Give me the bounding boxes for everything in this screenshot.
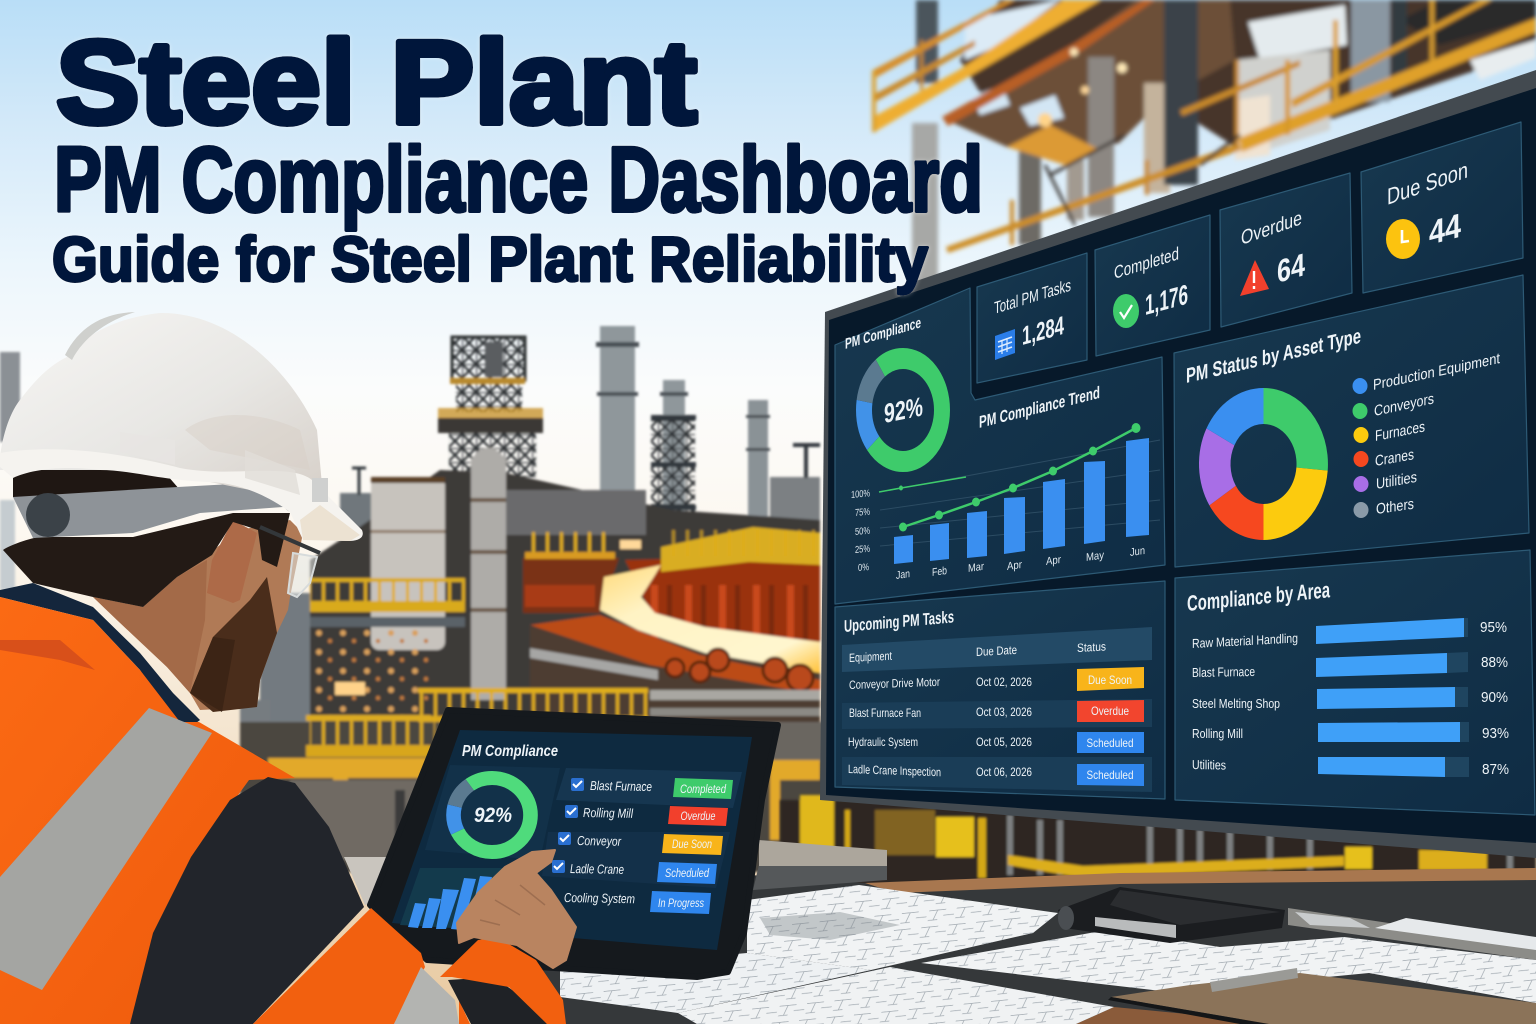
chart: PM compliance trend: 25% (855, 544, 870, 556)
panel: upcoming PM tasks: Hydraulic System (848, 735, 918, 749)
panel: compliance by area: Blast Furnace (1192, 664, 1255, 680)
dark sleeve (130, 777, 364, 1024)
panel: upcoming PM tasks: Oct 05, 2026 (976, 735, 1032, 749)
chart: PM compliance trend: Apr (1046, 554, 1061, 568)
glowing red structure (523, 527, 820, 740)
yellow walkway bottom (418, 688, 648, 724)
tablet list: In Progress (658, 898, 704, 910)
panel: compliance by area: 87% (1482, 761, 1509, 778)
tablet (370, 710, 778, 977)
icon: calendar (995, 329, 1015, 360)
tablet ring (454, 778, 530, 852)
chart: PM compliance trend (851, 382, 1160, 582)
worker (0, 312, 566, 1024)
panel: compliance by area: 93% (1482, 725, 1509, 742)
panel: upcoming PM tasks: Conveyor Drive Motor (849, 675, 940, 692)
panel: compliance by area: Steel Melting Shop (1192, 696, 1280, 711)
chart: PM compliance trend: Mar (968, 561, 984, 575)
legend: Others (1376, 496, 1414, 518)
status pills: Overdue (1091, 704, 1129, 718)
card: due soon (1361, 122, 1523, 293)
icon: check (1113, 294, 1139, 328)
smoke stacks (596, 326, 820, 550)
title line 2: PM Compliance Dashboard (54, 129, 983, 231)
panel: PM status by asset type (1174, 275, 1529, 567)
panel: upcoming PM tasks: Oct 03, 2026 (976, 705, 1032, 719)
head and neck (3, 460, 303, 712)
card: completed: 1,176 (1145, 279, 1188, 322)
panel: compliance by area: Raw Material Handling (1192, 630, 1298, 651)
chart: PM compliance trend: Apr (1007, 559, 1022, 573)
legend: Utilities (1376, 469, 1417, 493)
card: due soon: 44 (1429, 207, 1462, 253)
card: completed (1095, 215, 1210, 356)
panel: upcoming PM tasks: Oct 06, 2026 (976, 765, 1032, 779)
yellow walkway left (310, 578, 465, 627)
chart: PM compliance ring (864, 358, 942, 462)
chart: PM compliance trend: Feb (932, 565, 947, 579)
background: steel plant (0, 326, 850, 872)
icon: warning (1240, 260, 1269, 296)
device on table (1058, 887, 1285, 943)
panel: compliance by area: Utilities (1192, 757, 1226, 773)
card: completed: Completed (1114, 243, 1179, 283)
chart: PM compliance trend: 50% (855, 526, 870, 538)
card: overdue (1220, 173, 1352, 327)
chart: PM compliance trend: May (1086, 549, 1104, 564)
safety glasses (260, 527, 320, 597)
panel: PM compliance and trend background (835, 288, 1165, 604)
panel: upcoming PM tasks: Equipment (849, 649, 892, 665)
title line 3: Guide for Steel Plant Reliability (52, 225, 928, 295)
panel: compliance by area: 95% (1480, 619, 1507, 636)
molten steel strip (600, 565, 820, 673)
chart: PM compliance trend: Jun (1130, 545, 1145, 559)
blueprints (560, 885, 1536, 1024)
vest (0, 583, 295, 1024)
table (344, 840, 1536, 1024)
status pills: Due Soon (1088, 673, 1132, 687)
panel: upcoming PM tasks: Status (1077, 639, 1106, 655)
tablet list: Blast Furnace (590, 778, 652, 794)
panel: upcoming PM tasks: Upcoming PM Tasks (844, 607, 954, 636)
legend: Cranes (1375, 446, 1414, 470)
card: due soon: Due Soon (1387, 158, 1468, 211)
forearm cuff (440, 937, 566, 1024)
panel: compliance by area (1175, 550, 1535, 815)
card: total PM tasks: Total PM Tasks (994, 275, 1071, 318)
chart: PM compliance trend: 0% (858, 562, 869, 574)
tablet list: Overdue (680, 811, 716, 823)
panel: upcoming PM tasks: Oct 02, 2026 (976, 675, 1032, 689)
tablet heading: PM Compliance (462, 743, 558, 760)
card: total PM tasks (977, 253, 1087, 383)
panel: compliance by area: Rolling Mill (1192, 726, 1243, 741)
title line 1: Steel Plant (56, 17, 697, 149)
bars (1316, 618, 1469, 777)
chart: donut (1199, 388, 1328, 540)
status pills: Scheduled (1086, 768, 1134, 782)
helmet strap (13, 483, 300, 538)
panel: upcoming PM tasks: Blast Furnace Fan (849, 706, 921, 720)
tablet list: Scheduled (665, 868, 709, 880)
rollers (666, 649, 813, 691)
tablet ring: 92% (474, 804, 512, 827)
panel: compliance by area: 90% (1481, 689, 1508, 706)
tablet list: Conveyor (577, 833, 622, 849)
tablet list: Completed (680, 784, 726, 796)
panel: compliance by area: Compliance by Area (1187, 577, 1330, 616)
card: overdue: Overdue (1241, 207, 1302, 250)
grey box (753, 840, 887, 890)
icon: clock (1386, 219, 1420, 259)
panel: upcoming PM tasks: Ladle Crane Inspection (848, 762, 941, 779)
orange sleeve band (253, 908, 470, 1024)
legend: Furnaces (1375, 418, 1425, 445)
panel: upcoming PM tasks: Due Date (976, 643, 1017, 659)
tablet list (542, 768, 742, 914)
tablet list: Cooling System (564, 890, 635, 906)
legend: Production Equipment (1373, 350, 1501, 394)
hard hat (0, 312, 363, 541)
status pills (1077, 667, 1144, 786)
status pills: Scheduled (1086, 736, 1134, 750)
chart: PM compliance trend: Jan (896, 568, 910, 582)
panel: PM compliance heading: PM Compliance (845, 314, 921, 353)
hand (457, 850, 576, 968)
title (52, 17, 983, 295)
background: upper right steel structure (872, 0, 1536, 313)
chart: PM compliance trend: PM Compliance Trend (979, 382, 1100, 432)
tablet list: Rolling Mill (583, 805, 634, 821)
lattice tower (438, 337, 543, 477)
panel: compliance by area: 88% (1481, 654, 1508, 671)
legend: Conveyors (1374, 390, 1434, 420)
machinery under monitor (780, 795, 1536, 885)
tablet list: Due Soon (672, 839, 712, 851)
clipboard (1108, 968, 1536, 1024)
ring value: 92% (884, 391, 923, 429)
legend (1352, 350, 1501, 518)
chart: PM compliance trend: 75% (855, 507, 870, 519)
tablet list: Ladle Crane (570, 861, 624, 877)
chart: PM compliance trend: 100% (851, 488, 870, 501)
monitor (820, 70, 1536, 858)
panel: PM status by asset type: PM Status by Asset Type (1186, 324, 1361, 388)
panel: upcoming PM tasks (835, 581, 1165, 799)
card: overdue: 64 (1277, 246, 1305, 290)
tablet bars (400, 868, 505, 930)
card: total PM tasks: 1,284 (1022, 310, 1064, 351)
